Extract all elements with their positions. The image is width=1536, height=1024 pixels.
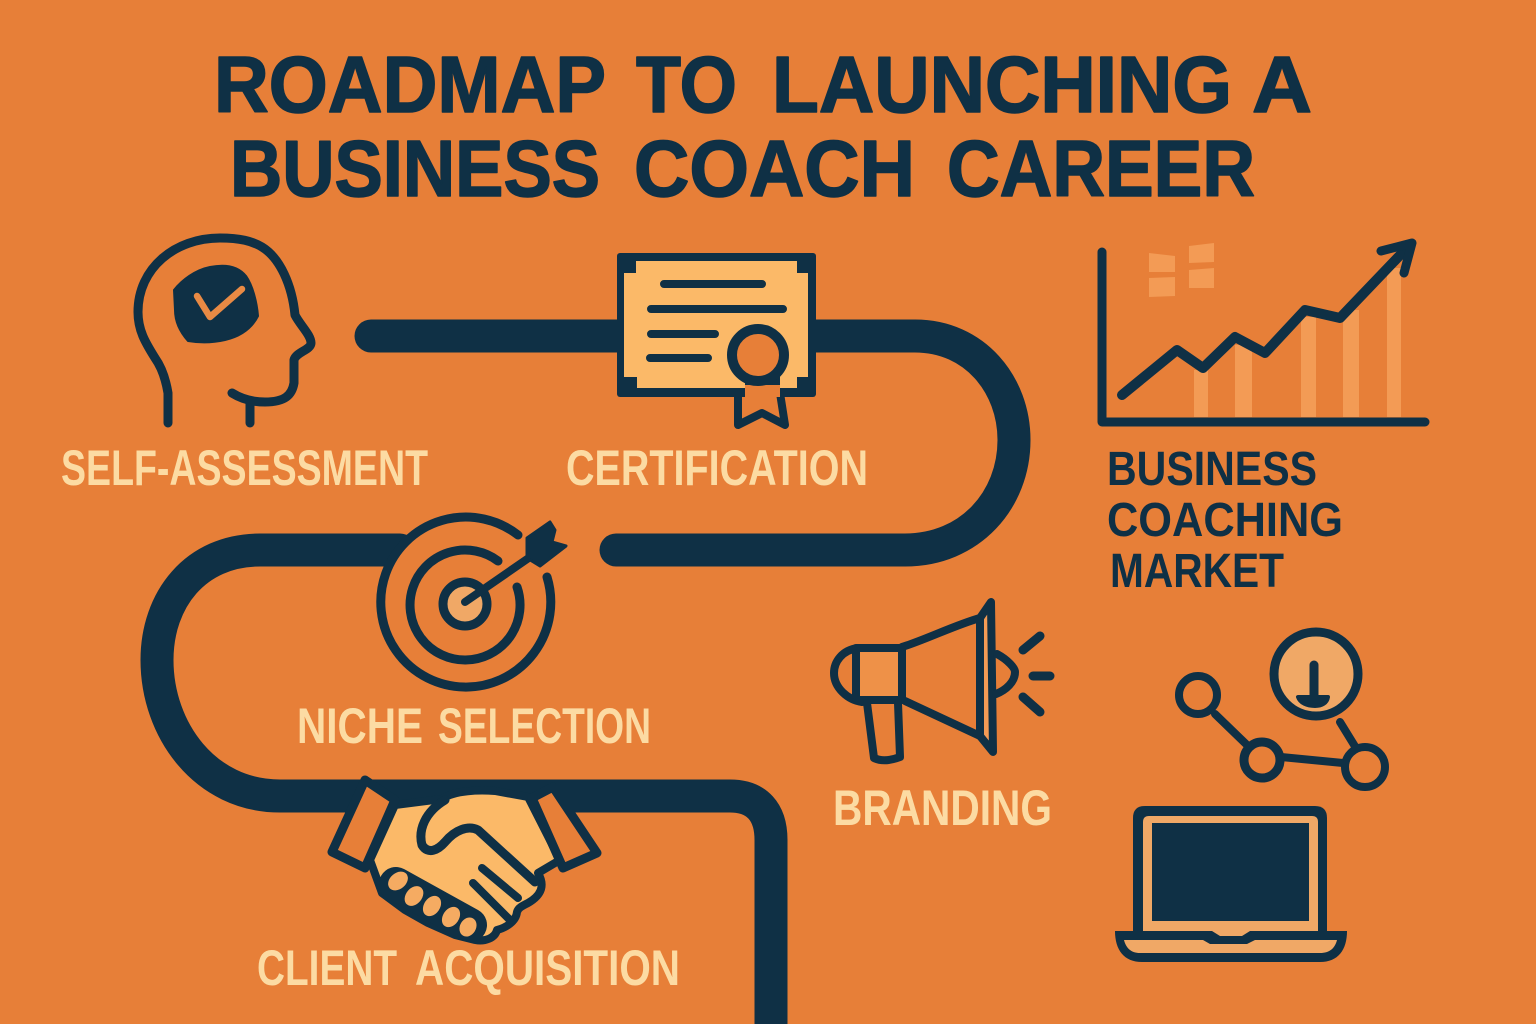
icon: megaphone	[834, 602, 1050, 760]
title: ROADMAP	[214, 40, 606, 129]
chart: market growth	[1102, 243, 1425, 422]
label: business coaching market: BUSINESS	[1107, 443, 1317, 496]
icon: target with arrow	[381, 517, 566, 687]
title: TO	[636, 40, 737, 129]
label: niche selection	[297, 698, 651, 754]
title	[214, 40, 1312, 213]
label: niche selection: SELECTION	[438, 698, 651, 754]
label: business coaching market: COACHING	[1107, 494, 1343, 547]
title: COACH	[634, 124, 915, 213]
icon: network nodes	[1179, 632, 1385, 787]
icon: head with check	[138, 238, 311, 423]
title: BUSINESS	[230, 124, 600, 213]
label: client acquisition	[257, 940, 680, 996]
label: business coaching market	[1107, 443, 1343, 598]
label: certification: CERTIFICATION	[566, 440, 868, 496]
label: branding: BRANDING	[833, 780, 1052, 836]
label: niche selection: NICHE	[297, 698, 423, 754]
icon: certificate	[617, 253, 816, 425]
icon: handshake	[332, 780, 597, 941]
title: LAUNCHING	[772, 40, 1232, 129]
label: client acquisition: ACQUISITION	[415, 940, 680, 996]
title: CAREER	[947, 124, 1255, 213]
icon: laptop	[1115, 806, 1347, 962]
title: A	[1252, 40, 1312, 129]
roadmap path	[157, 336, 1014, 1024]
label: client acquisition: CLIENT	[257, 940, 397, 996]
label: self-assessment: SELF-ASSESSMENT	[61, 440, 428, 496]
label: business coaching market: MARKET	[1110, 545, 1284, 598]
